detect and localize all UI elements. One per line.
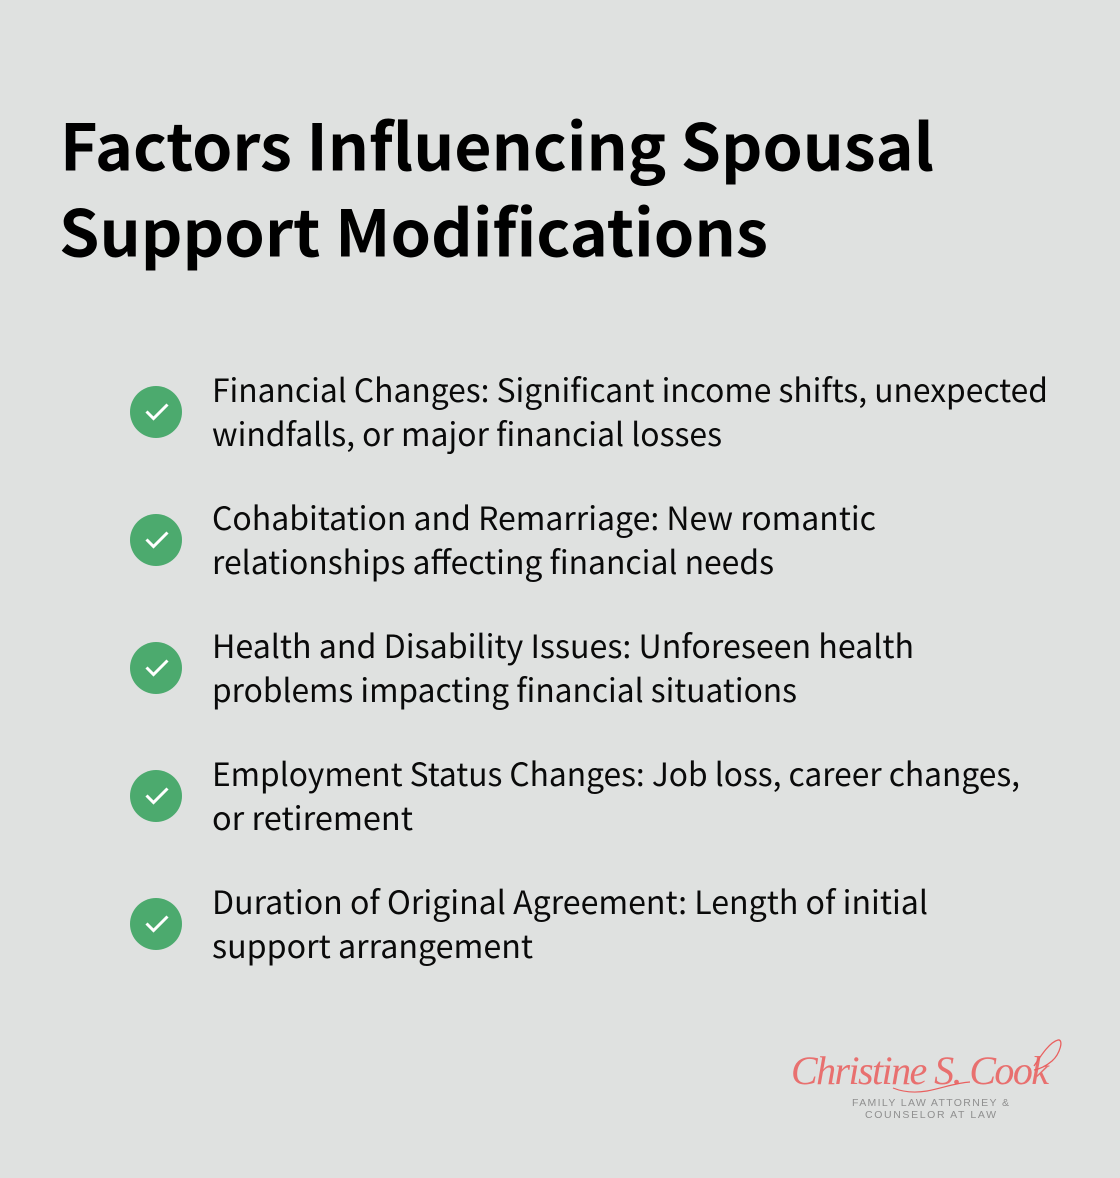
logo tagline: COUNSELOR AT LAW: [865, 1109, 996, 1121]
icon: check circle: [130, 514, 182, 566]
icon: check circle: [130, 770, 182, 822]
text: health and disability: Health and Disability Issues: Unforeseen health: [212, 622, 914, 668]
icon: check circle: [130, 642, 182, 694]
text: duration of agreement: [212, 878, 928, 968]
logo: [791, 1040, 1061, 1121]
text: cohabitation and remarriage: relationships affecting financial needs: [212, 538, 774, 584]
item: health and disability: [130, 622, 914, 712]
title: Factors Influencing Spousal: [60, 98, 934, 190]
item: financial changes: [130, 366, 1048, 456]
icon: check circle: [130, 898, 182, 950]
text: duration of agreement: support arrangement: [212, 922, 533, 968]
text: employment status: [212, 750, 1020, 840]
text: employment status: or retirement: [212, 794, 413, 840]
text: duration of agreement: Duration of Original Agreement: Length of initial: [212, 878, 928, 924]
item: cohabitation and remarriage: [130, 494, 876, 584]
text: employment status: Employment Status Changes: Job loss, career changes,: [212, 750, 1020, 796]
text: health and disability: problems impacting financial situations: [212, 666, 797, 712]
icon: check circle: [130, 386, 182, 438]
logo tagline: [852, 1097, 1009, 1121]
logo tagline: FAMILY LAW ATTORNEY &: [852, 1097, 1009, 1109]
text: health and disability: [212, 622, 914, 712]
item: employment status: [130, 750, 1020, 840]
text: cohabitation and remarriage: [212, 494, 876, 584]
list of factors: [130, 366, 1048, 968]
text: financial changes: Financial Changes: Significant income shifts, unexpected: [212, 366, 1048, 412]
item: duration of agreement: [130, 878, 928, 968]
logo name: Christine S. Cook: [791, 1048, 1050, 1093]
text: financial changes: [212, 366, 1048, 456]
text: financial changes: windfalls, or major financial losses: [212, 410, 722, 456]
title: [59, 98, 934, 276]
title: Support Modifications: [59, 184, 768, 276]
text: cohabitation and remarriage: Cohabitation and Remarriage: New romantic: [212, 494, 876, 540]
